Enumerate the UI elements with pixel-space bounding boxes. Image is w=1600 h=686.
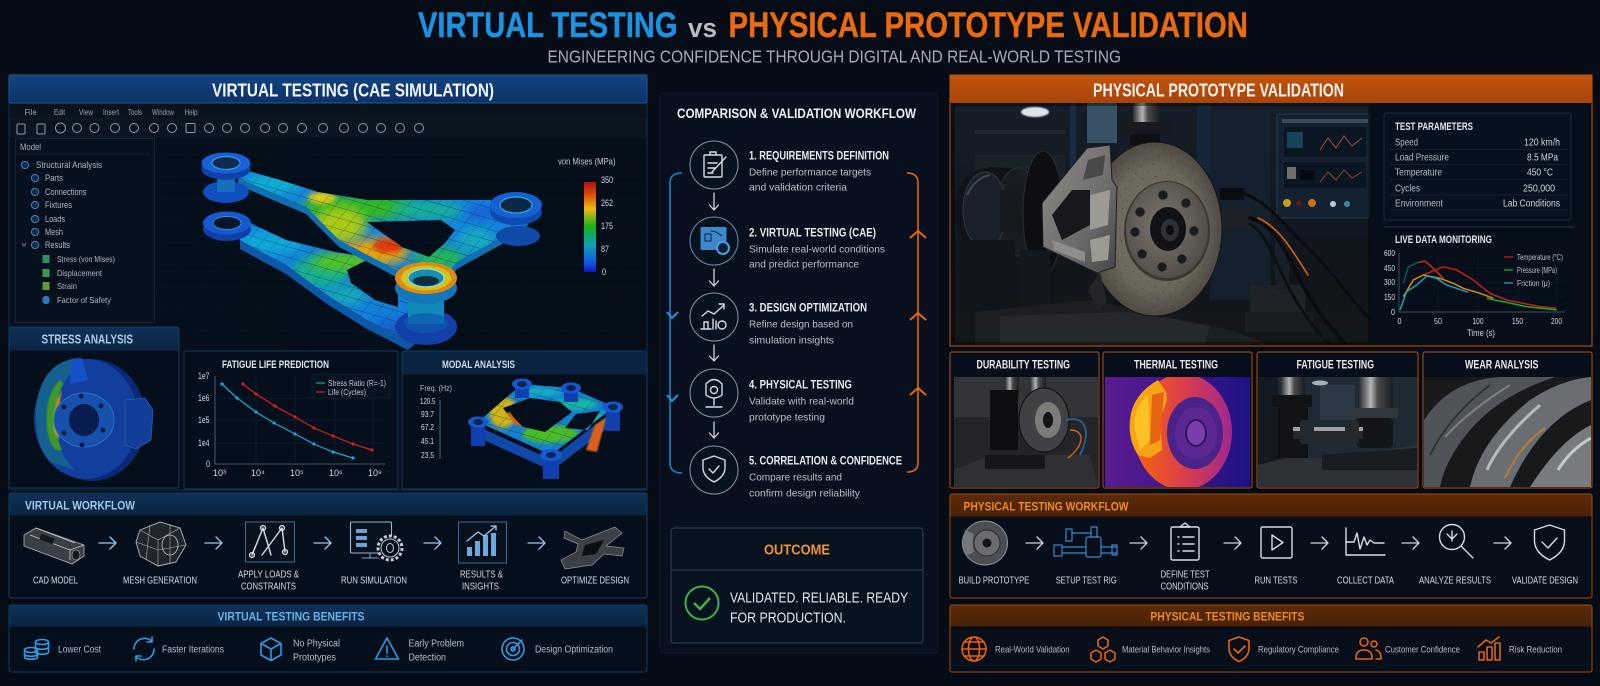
step 5 [690,446,902,500]
workflow labels: VALIDATE DESIGN [1512,576,1578,586]
arrow [710,345,718,361]
icon: setup test rig [1054,527,1117,557]
shaft [1118,103,1172,146]
step 2 [690,217,885,270]
icon: analyze results [1440,524,1473,558]
workflow labels: ANALYZE RESULTS [1419,576,1491,586]
panel: test parameters: Lab Conditions [1503,198,1560,210]
benefit labels: Prototypes [293,652,336,664]
benefit labels: Detection [408,652,446,664]
CAE menu bar: View [79,108,93,117]
workflow labels: CONDITIONS [1161,582,1209,592]
fatigue chart [198,371,390,478]
model tree panel: Factor of Safety [57,295,112,305]
model tree panel: Connections [45,187,87,197]
icon: build prototype [962,521,1008,565]
live chart [1384,249,1565,338]
arrow [710,269,718,286]
arrow [1494,537,1511,549]
model tree panel: Parts [45,173,63,183]
panel: test parameters: 250,000 [1523,184,1555,194]
photo: fatigue rig [1258,377,1417,487]
benefit labels: Customer Confidence [1385,644,1460,656]
photo: wear surface [1424,377,1591,487]
live chart: Time (s) [1467,328,1495,338]
step 3: Refine design based on [749,318,853,330]
step 5: 5. CORRELATION & CONFIDENCE [749,456,902,468]
panel: stress analysis: STRESS ANALYSIS [42,332,133,346]
panel: test parameters: 120 km/h [1524,138,1560,148]
right panel header [950,75,1592,103]
fatigue chart: Stress Ratio (R=-1) [328,379,386,388]
live chart: 300 [1384,278,1395,287]
stress contour: suspension arm [202,152,542,350]
icon: mesh generation [136,522,186,566]
fatigue chart: 0 [206,459,210,469]
right panel header: PHYSICAL PROTOTYPE VALIDATION [1093,80,1344,100]
live chart: 0 [1391,308,1395,317]
outcome box: VALIDATED. RELIABLE. READY [730,590,908,606]
fatigue chart: 10³ [213,468,226,478]
left panel header [9,75,647,103]
arrow [205,537,222,549]
panel: test parameters [1384,113,1571,220]
right bosses [490,192,542,246]
arrow [424,537,441,549]
modal frame contour [468,378,623,479]
live chart: 50 [1434,317,1442,326]
panel: test parameters: Environment [1395,198,1443,210]
icon: optimized design [561,527,624,569]
arrow [710,193,718,210]
icon: shield [1229,637,1249,662]
workflow labels: RESULTS & [460,570,503,580]
test monitor [1277,114,1369,218]
step 1: Define performance targets [749,166,871,178]
live chart: Temperature (°C) [1517,252,1563,262]
fatigue chart: 1e5 [198,415,210,425]
CAE menu bar: Window [152,108,174,117]
icon: faster iterations [134,637,154,661]
lower arm side wall [240,240,420,350]
workflow labels: COLLECT DATA [1337,576,1394,586]
benefit labels: No Physical [293,638,340,650]
panel: fatigue testing: FATIGUE TESTING [1296,360,1374,372]
frequency scale: 93.7 [421,409,434,419]
model tree panel [16,138,154,322]
model tree panel: Strain [57,281,77,291]
frequency scale [420,383,452,460]
CAE menu bar: Tools [128,108,142,117]
panel: wear analysis: WEAR ANALYSIS [1465,360,1539,372]
legend: von Mises colour bar: 350 [601,175,613,185]
arrow [710,422,718,438]
arrow [314,537,331,549]
benefit labels: Lower Cost [58,644,101,656]
fatigue chart: 10⁹ [368,468,382,478]
icon: globe [962,637,986,661]
workflow labels: INSIGHTS [462,582,499,592]
fatigue chart: 10⁴ [251,468,265,478]
model tree panel: Results [45,240,70,250]
benefit labels: Material Behavior Insights [1122,644,1210,656]
icon: run tests [1261,527,1292,558]
CAE menu bar: Edit [54,108,66,117]
panel: virtual testing benefits [9,605,647,672]
icon: target [502,638,524,660]
icon: coins [24,640,48,659]
vignette [952,103,1371,345]
panel: thermal testing [1103,352,1252,490]
panel: modal analysis: MODAL ANALYSIS [442,359,515,371]
live chart: 600 [1384,249,1395,258]
arrow [1130,537,1147,549]
lower-left boss [203,212,251,241]
fatigue chart: 1e7 [198,371,210,381]
model tree panel: Displacement [57,268,103,278]
brake disc [1088,142,1222,316]
outcome box [671,528,923,643]
stand and base [965,240,1313,345]
frequency scale: 45.1 [421,436,434,446]
legend: von Mises colour bar: 175 [601,221,613,231]
panel: physical testing workflow [950,494,1592,598]
brake disc contour [30,355,153,481]
CAE menu bar: Help [184,108,198,117]
panel: test parameters: Load Pressure [1395,152,1449,164]
icon: CAD model [24,528,84,564]
title: PHYSICAL PROTOTYPE VALIDATION [728,6,1248,45]
icon: collect data [1346,528,1385,555]
panel: wear analysis [1423,352,1592,488]
legend: von Mises colour bar: 0 [602,267,606,277]
panel: test parameters: Cycles [1395,184,1420,194]
step 5: confirm design reliability [749,488,861,500]
arrow [1026,537,1043,549]
caliper [1042,145,1117,310]
model tree panel: Mesh [45,227,63,237]
outcome box: FOR PRODUCTION. [730,610,846,626]
arrow [1311,537,1328,549]
panel: test parameters: 450 °C [1527,168,1553,178]
icon: results and insights [458,522,506,563]
live chart: 100 [1472,317,1484,326]
panel: durability testing [950,352,1099,488]
frequency scale: Freq. (Hz) [420,383,452,393]
upper arm plate [238,172,524,270]
live chart: 150 [1384,293,1395,302]
panel: stress analysis [9,327,179,488]
upper arm side wall [238,178,530,292]
motor [955,151,1063,275]
panel: live data monitoring: LIVE DATA MONITORING [1395,234,1492,246]
workflow labels: BUILD PROTOTYPE [959,576,1029,586]
icon: run simulation [350,522,402,560]
title: VIRTUAL TESTING [418,6,678,45]
step 3 [690,293,867,346]
panel: virtual workflow: VIRTUAL WORKFLOW [25,498,136,512]
step 1: and validation criteria [749,182,847,194]
model tree panel: Structural Analysis [36,160,102,170]
step 3: simulation insights [749,334,834,346]
left panel header: VIRTUAL TESTING (CAE SIMULATION) [212,80,494,100]
icon: early detection [376,638,398,659]
legend: von Mises colour bar: 87 [601,244,609,254]
panel: physical testing benefits [950,605,1592,672]
photo: thermal image [1105,374,1250,490]
fatigue chart: Life (Cycles) [328,388,366,397]
CAE menu bar [10,104,646,119]
panel: test parameters: 8.5 MPa [1527,152,1558,164]
bottom bosses [395,262,457,345]
live chart: 150 [1512,317,1523,326]
panel: comparison workflow: COMPARISON & VALIDATION WORKFLOW [677,105,917,121]
photo: durability rig [954,377,1098,487]
subtitle: ENGINEERING CONFIDENCE THROUGH DIGITAL AND REAL-WORLD TESTING [548,46,1121,66]
step 2: Simulate real-world conditions [749,244,885,256]
workflow labels: SETUP TEST RIG [1056,576,1117,586]
panel: comparison workflow [660,93,938,653]
panel: live data monitoring [1384,227,1575,338]
CAE menu bar: File [24,108,37,117]
orange loop line [907,173,926,472]
blue loop line [667,173,682,473]
viewport grid floor [156,138,646,350]
panel: virtual testing benefits: VIRTUAL TESTING BENEFITS [218,610,364,624]
legend: von Mises colour bar: 262 [601,198,613,208]
CAE menu bar: Insert [103,108,120,117]
panel: test parameters: Speed [1395,138,1418,148]
model tree panel: Loads [45,214,65,224]
benefit labels: Risk Reduction [1509,644,1562,656]
panel: thermal testing: THERMAL TESTING [1134,360,1218,372]
panel: test parameters: Temperature [1395,168,1442,178]
fatigue chart: 10⁶ [329,468,343,478]
benefit labels: Faster Iterations [162,644,224,656]
workflow labels: RUN SIMULATION [341,576,407,586]
frequency scale: 67.2 [421,422,434,432]
step 1: 1. REQUIREMENTS DEFINITION [749,150,889,162]
icon: hexagons [1091,637,1115,662]
icon: no physical prototypes [261,638,281,660]
benefit labels: Regulatory Compliance [1258,644,1339,656]
left panel frame [9,75,647,490]
workflow labels [33,570,629,592]
live chart: 450 [1384,264,1395,273]
step 4 [690,369,854,424]
outcome box: OUTCOME [764,542,830,558]
panel: virtual workflow [9,493,647,598]
icon: people [1356,638,1381,659]
step 4: 4. PHYSICAL TESTING [749,380,852,392]
step 4: Validate with real-world [749,396,854,408]
panel: physical testing benefits: PHYSICAL TESTING BENEFITS [1150,610,1304,624]
workflow labels: OPTIMIZE DESIGN [561,576,629,586]
panel: test parameters: TEST PARAMETERS [1395,121,1473,133]
icon: define test conditions [1171,523,1199,560]
workflow labels: RUN TESTS [1254,576,1298,586]
arrow [1402,537,1419,549]
step 5: Compare results and [749,472,842,484]
arrow [528,537,545,549]
panel: fatigue life prediction [184,351,398,489]
model tree panel: Stress (von Mises) [57,254,115,264]
step 2: and predict performance [749,258,859,270]
icon: risk chart [1478,637,1500,660]
live chart: 200 [1551,317,1562,326]
live chart: Pressure (MPa) [1517,265,1557,275]
panel: fatigue testing [1257,352,1418,488]
benefit labels [58,638,613,664]
icon: check [686,586,718,620]
fatigue chart: 10⁵ [290,468,304,478]
photo: brake test rig [952,103,1371,345]
workflow labels: CONSTRAINTS [241,582,296,592]
panel: virtual testing [9,75,647,672]
fatigue chart: 1e4 [198,438,210,448]
title [418,6,1248,45]
panel: modal analysis [402,351,647,489]
cables [1220,188,1371,345]
CAE toolbar [10,119,646,137]
step 4: prototype testing [749,412,825,424]
model tree panel: Fixtures [45,200,72,210]
step 1 [690,141,889,194]
panel: physical testing workflow: PHYSICAL TESTING WORKFLOW [964,500,1129,514]
legend: von Mises colour bar: von Mises (MPa) [558,156,616,166]
live chart: 0 [1398,317,1402,326]
panel: fatigue life prediction: FATIGUE LIFE PREDICTION [222,359,329,371]
panel: physical prototype [950,75,1592,346]
benefit labels: Early Problem [408,638,464,650]
benefit labels [995,644,1562,656]
live chart: Friction (μ) [1517,278,1550,288]
arrow [99,537,116,549]
legend: von Mises colour bar [558,156,616,277]
model tree panel: Model [20,142,41,152]
step 2: 2. VIRTUAL TESTING (CAE) [749,228,876,240]
workflow labels: CAD MODEL [33,576,78,586]
workflow labels: MESH GENERATION [123,576,197,586]
frequency scale: 120.5 [420,396,436,406]
fatigue chart: 1e6 [198,393,210,403]
frequency scale: 23.5 [421,450,434,460]
benefit labels: Real-World Validation [995,644,1070,656]
step 3: 3. DESIGN OPTIMIZATION [749,302,867,314]
icon: validate design [1534,525,1564,560]
panel: durability testing: DURABILITY TESTING [976,360,1070,372]
workflow labels: DEFINE TEST [1161,570,1210,580]
title: vs [688,13,717,43]
benefit labels: Design Optimization [535,644,613,656]
workflow labels [959,570,1578,592]
arrow [1224,537,1241,549]
icon: apply loads and constraints [246,522,294,562]
top-left bosses [202,152,250,203]
lower arm plate [240,223,408,336]
workflow labels: APPLY LOADS & [238,570,299,580]
